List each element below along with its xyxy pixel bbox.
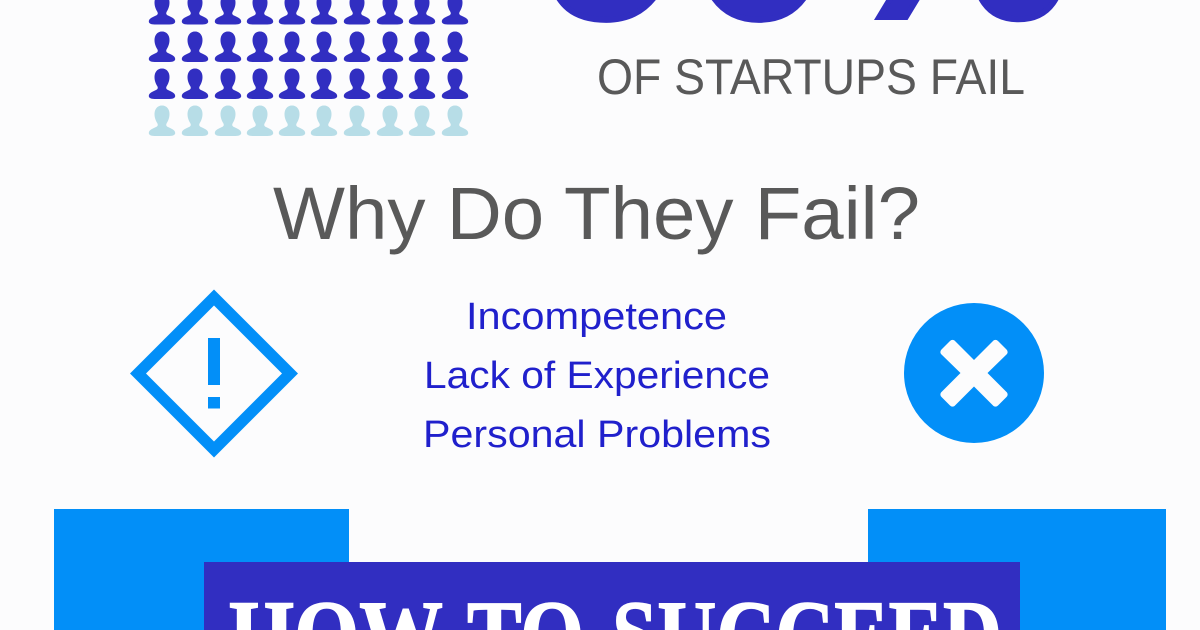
reason: lack of experience: Lack of Experience bbox=[424, 355, 770, 397]
subheading: of startups fail: OF STARTUPS FAIL bbox=[597, 49, 1025, 105]
banner: how to succeed bbox=[54, 509, 1166, 630]
banner title bbox=[229, 580, 1002, 630]
icon: warning diamond bbox=[130, 290, 298, 458]
list of failure reasons bbox=[423, 296, 771, 456]
pictogram: nine in ten people bbox=[149, 0, 468, 136]
reason: personal problems: Personal Problems bbox=[423, 414, 771, 456]
heading: why do they fail: Why Do They Fail? bbox=[273, 172, 920, 255]
icon: x in circle bbox=[904, 303, 1044, 443]
reason: incompetence: Incompetence bbox=[466, 296, 727, 338]
